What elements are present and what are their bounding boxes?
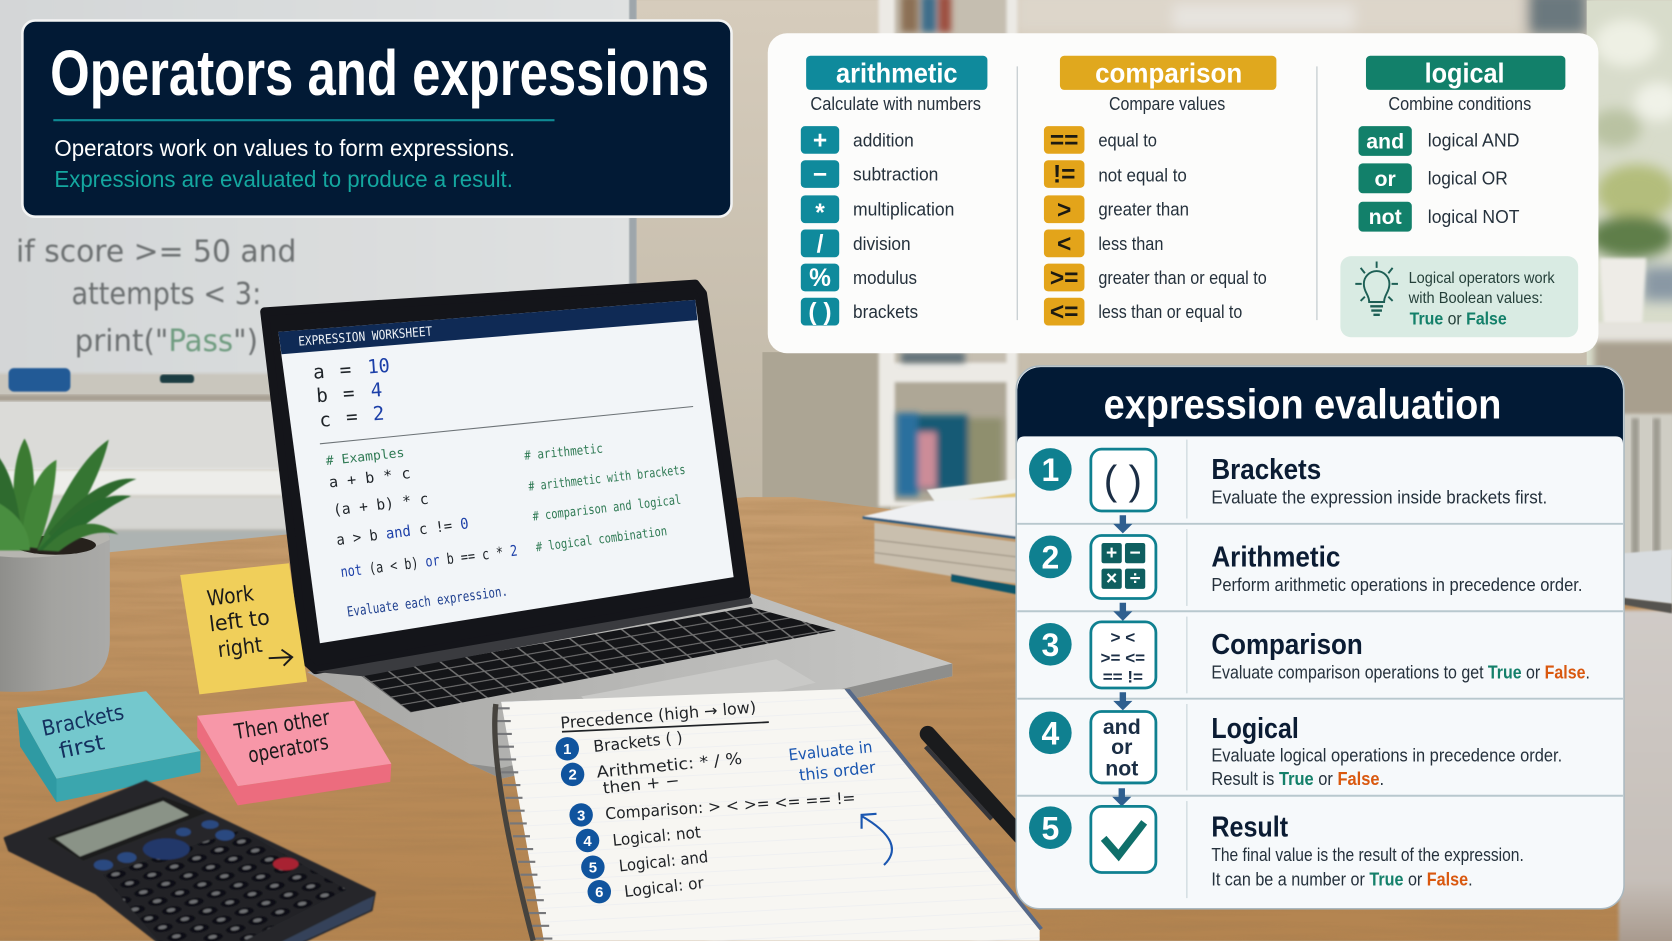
icon: calculator keys: + xyxy=(1106,543,1117,564)
tip box xyxy=(1340,256,1578,337)
step 4: logical: and xyxy=(1103,715,1141,739)
icon: calculator keys: × xyxy=(1106,569,1117,590)
step 3: comparison: == != xyxy=(1103,668,1143,687)
sticky note: work left to right: left to xyxy=(208,605,271,637)
comparison column: comparison xyxy=(1095,57,1242,88)
step 3: comparison: > < xyxy=(1111,628,1135,647)
expression evaluation panel xyxy=(1016,366,1624,909)
spiral binding xyxy=(493,704,552,941)
tip text: Logical operators work xyxy=(1409,270,1556,287)
step 2: Arithmetic: * / % xyxy=(596,749,743,782)
pot xyxy=(0,536,110,692)
title: Operators and expressions xyxy=(50,37,709,109)
calculator xyxy=(5,782,374,941)
step 3: comparison: Comparison xyxy=(1211,629,1363,661)
sticky note: then other operators: operators xyxy=(246,730,330,769)
step 3: comparison: Evaluate comparison operations to get True or False. xyxy=(1211,661,1590,682)
step 1: brackets: ( ) xyxy=(1104,457,1142,503)
arrow on sticky note xyxy=(269,650,292,666)
comparison column: < xyxy=(1057,231,1071,258)
worksheet screen: = xyxy=(342,381,355,405)
stack of books xyxy=(863,479,1016,594)
comparison column: Compare values xyxy=(1109,94,1225,114)
step 4: logical: 4 xyxy=(1041,716,1059,752)
step 4: logical xyxy=(1029,711,1562,789)
arithmetic column: Calculate with numbers xyxy=(810,94,981,114)
handwritten note: Evaluate in xyxy=(788,737,873,765)
comparison column: equal to xyxy=(1098,130,1157,150)
comparison column: less than xyxy=(1098,234,1163,254)
notebook with precedence list: this order xyxy=(798,757,877,785)
right side: closed laptop and pale mat xyxy=(1619,549,1672,941)
worksheet screen: not (a < b) or b == c * 2 xyxy=(340,542,518,581)
laptop lid xyxy=(264,284,746,670)
arithmetic column: % xyxy=(809,265,831,292)
comparison column xyxy=(1044,56,1276,326)
step 4: logical: Result is True or False. xyxy=(1211,768,1384,789)
logical column: logical AND xyxy=(1428,130,1520,150)
arithmetic column: modulus xyxy=(853,268,917,288)
tip box: True or False xyxy=(1410,308,1507,328)
sticky note: brackets first xyxy=(17,691,200,802)
step 2: arithmetic: Arithmetic xyxy=(1211,541,1340,573)
logical column: logical NOT xyxy=(1428,207,1520,227)
wooden desk xyxy=(0,491,1672,941)
step 5: 5 xyxy=(589,860,597,877)
laptop xyxy=(264,284,952,779)
worksheet screen xyxy=(278,300,734,643)
sticky note: work left to right: right xyxy=(216,633,264,663)
icon: calculator keys: − xyxy=(1129,543,1141,564)
step 4: 4 xyxy=(583,833,592,850)
background: blurred bookshelf xyxy=(879,0,1017,507)
background: window and plant on right xyxy=(1587,0,1672,558)
arrow 2 to 3 xyxy=(1113,603,1132,621)
step 2: 2 xyxy=(568,767,577,784)
step 2: arithmetic: Perform arithmetic operations in precedence order. xyxy=(1211,574,1582,595)
step 4: logical: not xyxy=(1105,756,1138,780)
arithmetic column xyxy=(801,56,987,326)
step 5: result: It can be a number or True or False. xyxy=(1211,868,1473,889)
comparison column: greater than xyxy=(1098,200,1189,220)
worksheet screen: a + b * c xyxy=(328,464,412,492)
curved arrow xyxy=(862,814,892,865)
calculator dial xyxy=(143,838,190,860)
logical column: or xyxy=(1375,167,1396,191)
whiteboard code line 2: attempts < 3: xyxy=(71,277,261,312)
arithmetic column: division xyxy=(853,234,911,254)
logical column: Combine conditions xyxy=(1388,94,1531,114)
step 6 xyxy=(588,873,705,903)
icon: calculator keys: ÷ xyxy=(1130,569,1141,590)
notebook with precedence list xyxy=(493,689,1043,941)
screen title: EXPRESSION WORKSHEET xyxy=(298,324,433,350)
step 1: brackets: Brackets xyxy=(1211,454,1321,486)
arithmetic column: subtraction xyxy=(853,164,938,184)
comparison column: greater than or equal to xyxy=(1098,268,1267,288)
step 4 xyxy=(576,822,702,852)
step 4: Logical: not xyxy=(612,822,702,850)
comparison column: != xyxy=(1053,162,1075,189)
sticky note: brackets first: Brackets xyxy=(40,700,126,742)
logical column: not xyxy=(1369,205,1402,229)
logical column xyxy=(1340,56,1578,337)
title panel xyxy=(22,21,731,217)
subtitle line 1: Operators work on values to form expressions. xyxy=(54,135,515,161)
step 2: arithmetic: 2 xyxy=(1041,540,1059,576)
logical column: and xyxy=(1366,129,1404,153)
arithmetic column: + xyxy=(813,127,827,154)
arithmetic column: multiplication xyxy=(853,200,954,220)
comparison column: less than or equal to xyxy=(1098,302,1242,322)
calculator display xyxy=(55,801,189,857)
arrow 3 to 4 xyxy=(1113,692,1132,710)
step 2: then + − xyxy=(602,771,680,798)
step 1: brackets: Evaluate the expression inside brackets first. xyxy=(1211,487,1547,508)
pen xyxy=(926,734,1022,837)
step 1: brackets xyxy=(1029,448,1547,511)
sticky note: work left to right xyxy=(180,563,307,694)
step 6: Logical: or xyxy=(623,873,705,901)
arrow 1 to 2 xyxy=(1113,515,1132,533)
icon: calculator keys xyxy=(1102,543,1145,590)
operators panel xyxy=(768,33,1598,353)
calculator red key xyxy=(273,858,299,870)
step 4: logical: or xyxy=(1111,735,1132,759)
code comments: # arithmetic xyxy=(524,442,604,464)
step 2 xyxy=(561,749,743,798)
step 2: arithmetic xyxy=(1029,536,1582,598)
sticky note: work left to right: Work xyxy=(206,581,256,612)
step 3: comparison: >= <= xyxy=(1101,649,1145,668)
worksheet screen: a > b and c != 0 xyxy=(335,514,470,549)
step 4: logical: Evaluate logical operations in precedence order. xyxy=(1211,745,1562,766)
sticky note: then other operators xyxy=(197,701,391,805)
notebook heading: Precedence (high → low) xyxy=(560,698,757,733)
worksheet screen: (a + b) * c xyxy=(332,490,430,519)
leaves xyxy=(0,439,136,552)
variable a: a xyxy=(312,360,325,384)
logical column: logical xyxy=(1425,57,1505,88)
step 1: brackets: 1 xyxy=(1041,452,1059,488)
arithmetic column: ( ) xyxy=(808,299,832,326)
step 1: 1 xyxy=(563,741,571,758)
step 3: comparison xyxy=(1029,622,1590,688)
step 5 xyxy=(581,847,709,879)
worksheet screen: # arithmetic with brackets xyxy=(528,463,686,495)
step 5: result: The final value is the result of the expression. xyxy=(1211,844,1524,865)
step 1: Brackets ( ) xyxy=(592,728,683,756)
worksheet screen: 2 xyxy=(372,402,385,425)
icon: light bulb xyxy=(1355,262,1398,315)
variable b: b xyxy=(315,383,329,407)
whiteboard code line 3: print("Pass") xyxy=(75,324,258,359)
keyboard xyxy=(360,607,836,713)
step 3: Comparison: > < >= <= == != xyxy=(605,788,856,823)
variable c: c xyxy=(319,408,332,432)
step 5: result: 5 xyxy=(1041,810,1059,846)
worksheet screen: Evaluate each expression. xyxy=(346,584,509,621)
arrow 4 to 5 xyxy=(1112,788,1131,806)
whiteboard with blurred code xyxy=(0,0,645,401)
subtitle line 2: Expressions are evaluated to produce a result. xyxy=(54,166,513,192)
laptop base xyxy=(307,592,952,779)
whiteboard code line 1: if score >= 50 and xyxy=(16,235,296,270)
example expressions: # Examples xyxy=(325,446,405,469)
arithmetic column: − xyxy=(813,162,827,189)
worksheet screen: # comparison and logical xyxy=(532,493,682,525)
comparison column: > xyxy=(1057,197,1071,224)
worksheet screen: 10 xyxy=(367,354,391,378)
arithmetic column: / xyxy=(817,231,824,258)
arithmetic column: brackets xyxy=(853,302,918,322)
worksheet screen: # logical combination xyxy=(535,524,668,556)
worksheet screen: = xyxy=(339,358,352,382)
worksheet screen: = xyxy=(345,405,358,429)
step 4: logical: Logical xyxy=(1211,713,1299,745)
step 5: Logical: and xyxy=(618,847,709,875)
tip box: with Boolean values: xyxy=(1408,290,1543,307)
step 5: result xyxy=(1029,806,1524,889)
step 6: 6 xyxy=(595,884,603,901)
step 3: comparison: 3 xyxy=(1041,627,1059,663)
comparison column: >= xyxy=(1050,265,1079,292)
sticky note: brackets first: first xyxy=(57,730,107,764)
plant in concrete pot xyxy=(0,439,136,692)
trackpad xyxy=(581,659,816,727)
step 1 xyxy=(556,728,683,761)
arithmetic column: * xyxy=(815,200,825,227)
arithmetic column: arithmetic xyxy=(836,57,958,88)
panel header xyxy=(1017,367,1623,444)
worksheet screen: 4 xyxy=(370,378,383,402)
step 5: result: Result xyxy=(1211,811,1288,843)
arithmetic column: addition xyxy=(853,130,914,150)
logical column: logical OR xyxy=(1428,169,1508,189)
comparison column: == xyxy=(1050,127,1079,154)
step 3: 3 xyxy=(577,807,585,824)
panel header: expression evaluation xyxy=(1104,380,1501,427)
comparison column: not equal to xyxy=(1098,166,1187,186)
comparison column: <= xyxy=(1050,299,1079,326)
icon: check mark xyxy=(1104,822,1144,855)
sticky note: then other operators: Then other xyxy=(232,705,332,745)
